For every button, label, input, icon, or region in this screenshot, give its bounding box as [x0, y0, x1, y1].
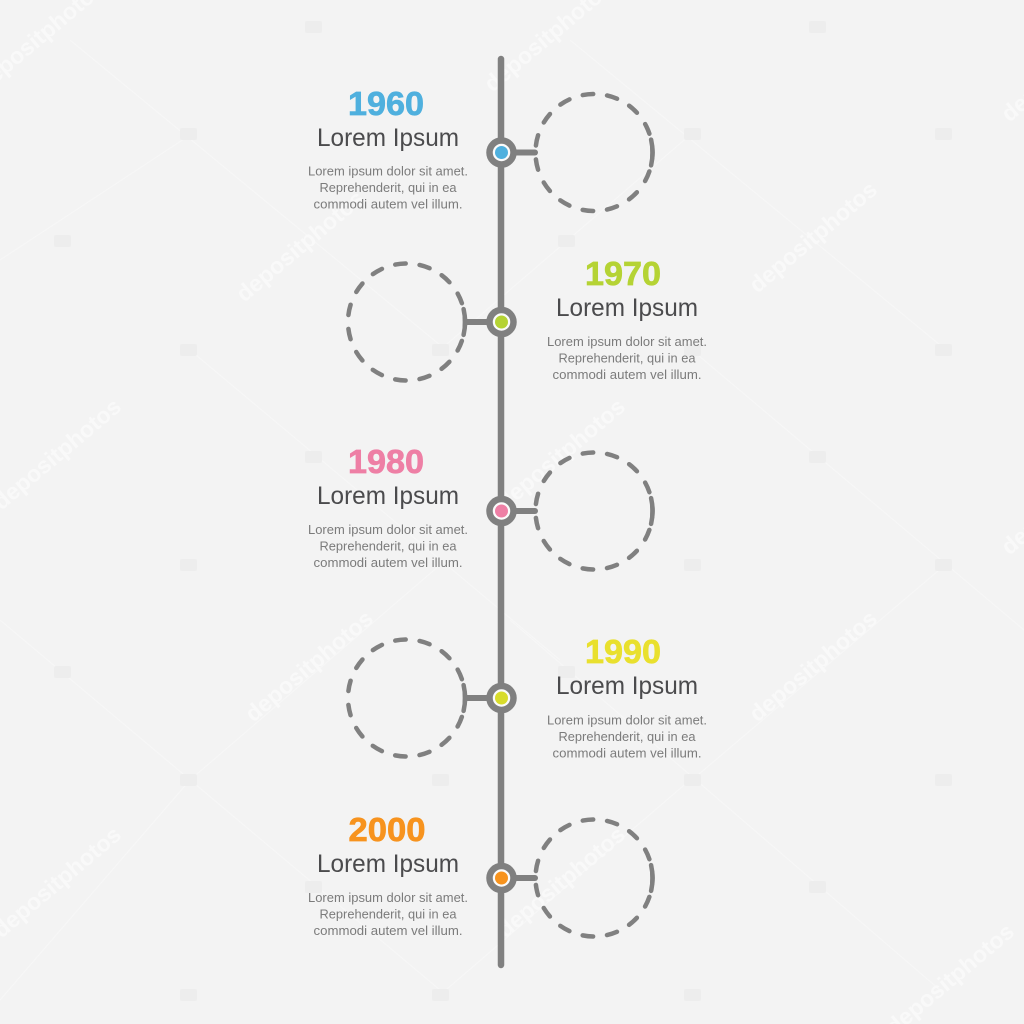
- dashed circle placeholder 2000: [536, 820, 653, 936]
- connector 1980: [515, 508, 535, 514]
- dashed circle placeholder 1990: [348, 640, 465, 756]
- timeline node 1990: [490, 686, 514, 710]
- connector 2000: [515, 875, 535, 881]
- heading 1960: Lorem Ipsum: [317, 124, 459, 152]
- watermark text: depositphotos: [231, 185, 369, 307]
- year 2000: 2000: [348, 811, 426, 848]
- timeline vertical line: [498, 59, 504, 965]
- description 1990: commodi autem vel illum.: [552, 746, 702, 760]
- description 1970: commodi autem vel illum.: [552, 367, 702, 382]
- description 1990: Lorem ipsum dolor sit amet.: [547, 712, 707, 728]
- description 2000: Reprehenderit, qui in ea: [320, 906, 457, 922]
- description 1970: [547, 334, 707, 382]
- watermark text: depositphotos: [744, 605, 882, 727]
- description 2000: [308, 890, 468, 938]
- heading 1980: Lorem Ipsum: [317, 482, 459, 510]
- description 1980: [308, 522, 468, 570]
- description 1980: commodi autem vel illum.: [314, 555, 462, 570]
- heading 2000: Lorem Ipsum: [317, 850, 459, 878]
- description 1960: [308, 164, 468, 212]
- heading 1970: Lorem Ipsum: [556, 294, 698, 322]
- milestone: 1990: [348, 633, 707, 760]
- milestone: 1960: [308, 85, 653, 212]
- year 1980: 1980: [348, 443, 424, 480]
- description 1970: Reprehenderit, qui in ea: [558, 350, 696, 366]
- watermark text: depositphotos: [744, 176, 882, 298]
- dashed circle placeholder 1960: [536, 94, 653, 211]
- watermark text: depositphotos: [492, 821, 630, 943]
- description 1990: Reprehenderit, qui in ea: [558, 729, 696, 744]
- description 2000: commodi autem vel illum.: [314, 923, 462, 938]
- watermark text: depositphotos: [492, 393, 630, 515]
- milestone: 2000: [308, 811, 653, 938]
- watermark text: depositphotos: [240, 605, 378, 727]
- timeline node 1980: [490, 499, 514, 523]
- milestone: 1980: [308, 443, 653, 570]
- milestone: 1970: [348, 255, 707, 382]
- timeline node 1970: [490, 310, 514, 334]
- year 1960: 1960: [348, 85, 424, 122]
- description 1960: commodi autem vel illum.: [314, 196, 462, 212]
- description 1970: Lorem ipsum dolor sit amet.: [547, 334, 707, 349]
- description 1980: Reprehenderit, qui in ea: [320, 538, 457, 554]
- description 1990: [547, 712, 707, 760]
- dashed circle placeholder 1970: [348, 264, 465, 380]
- description 1960: Reprehenderit, qui in ea: [320, 180, 457, 195]
- connector 1960: [515, 150, 535, 156]
- connector 1970: [466, 319, 487, 325]
- year 1970: 1970: [585, 255, 661, 292]
- connector 1990: [466, 695, 487, 701]
- description 2000: Lorem ipsum dolor sit amet.: [308, 890, 468, 905]
- description 1960: Lorem ipsum dolor sit amet.: [308, 164, 468, 178]
- description 1980: Lorem ipsum dolor sit amet.: [308, 522, 468, 537]
- timeline node 1960: [490, 140, 514, 164]
- dashed circle placeholder 1980: [536, 452, 653, 570]
- timeline node 2000: [490, 866, 514, 890]
- heading 1990: Lorem Ipsum: [556, 672, 698, 700]
- year 1990: 1990: [585, 633, 661, 670]
